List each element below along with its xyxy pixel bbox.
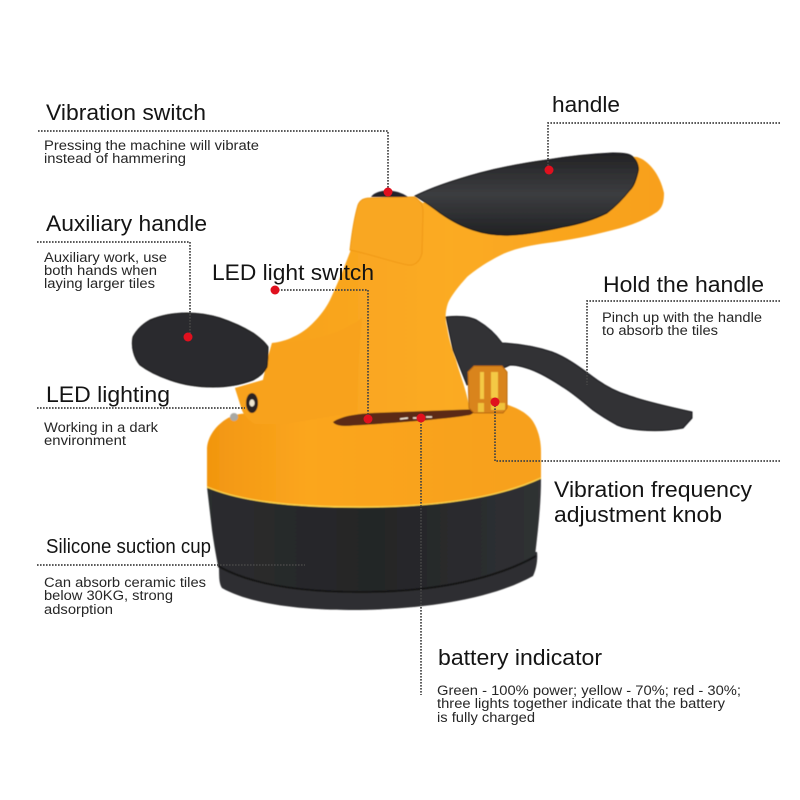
rear lever handle xyxy=(446,316,692,431)
label: silicone suction cup: Can absorb ceramic tiles xyxy=(44,575,206,590)
lamp lens xyxy=(249,399,255,407)
label: LED lighting: environment xyxy=(44,433,126,448)
label: auxiliary handle: Auxiliary work, use xyxy=(44,250,167,265)
label: silicone suction cup xyxy=(44,536,211,617)
top cap xyxy=(350,197,423,265)
label: hold the handle xyxy=(602,272,764,338)
silver lamp stud xyxy=(230,413,238,421)
knob base highlight xyxy=(478,403,505,412)
label: vibration switch: Pressing the machine will vibrate xyxy=(44,138,259,153)
suction cup body xyxy=(207,478,541,592)
label: auxiliary handle: laying larger tiles xyxy=(44,276,155,291)
product: vibration tool xyxy=(132,153,692,610)
label: battery indicator xyxy=(437,645,741,725)
label: silicone suction cup: adsorption xyxy=(44,602,113,617)
label: vibration switch xyxy=(44,100,259,166)
suction cup lip xyxy=(217,552,537,610)
knob highlights xyxy=(480,372,498,399)
label: auxiliary handle: Auxiliary handle xyxy=(46,211,207,236)
leader lines xyxy=(37,123,780,695)
knob body xyxy=(468,366,507,413)
indicator lights xyxy=(400,417,432,419)
vibration switch button xyxy=(371,191,408,197)
label: battery indicator: battery indicator xyxy=(438,645,602,670)
label: battery indicator: three lights together indicate that the battery xyxy=(437,696,725,711)
label: hold the handle: Pinch up with the handle xyxy=(602,310,762,325)
lamp housing xyxy=(246,393,258,413)
base edge highlight xyxy=(207,478,541,507)
label: vibration frequency adjustment knob xyxy=(554,477,752,527)
label: vibration switch: instead of hammering xyxy=(44,151,186,166)
label: auxiliary handle: both hands when xyxy=(44,263,157,278)
orange base xyxy=(207,404,541,507)
label: hold the handle: to absorb the tiles xyxy=(602,323,718,338)
frequency knob xyxy=(468,366,507,413)
LED lamp socket xyxy=(246,393,258,413)
red marker dots xyxy=(184,166,554,424)
label: hold the handle: Hold the handle xyxy=(603,272,764,297)
orange body with handle arm xyxy=(235,156,664,424)
label: battery indicator: is fully charged xyxy=(437,710,535,725)
label: vibration frequency adjustment knob: adjustment knob xyxy=(554,502,722,527)
label: LED light switch: LED light switch xyxy=(212,260,374,285)
label: LED lighting: LED lighting xyxy=(46,382,170,407)
label: battery indicator: Green - 100% power; yellow - 70%; red - 30%; xyxy=(437,683,741,698)
label: auxiliary handle xyxy=(44,211,207,291)
main black handle grip xyxy=(415,153,638,235)
label: silicone suction cup: Silicone suction cup xyxy=(46,536,211,558)
label: LED lighting: Working in a dark xyxy=(44,420,158,435)
label: handle: handle xyxy=(552,92,620,117)
label: vibration switch: Vibration switch xyxy=(46,100,206,125)
body shading fold xyxy=(235,318,362,424)
auxiliary black handle xyxy=(132,313,268,387)
control panel slot xyxy=(333,409,480,426)
suction cup ring line xyxy=(218,556,536,592)
label: LED lighting xyxy=(44,382,170,448)
label: vibration frequency adjustment knob: Vibration frequency xyxy=(554,477,752,502)
label: silicone suction cup: below 30KG, strong xyxy=(44,588,173,603)
